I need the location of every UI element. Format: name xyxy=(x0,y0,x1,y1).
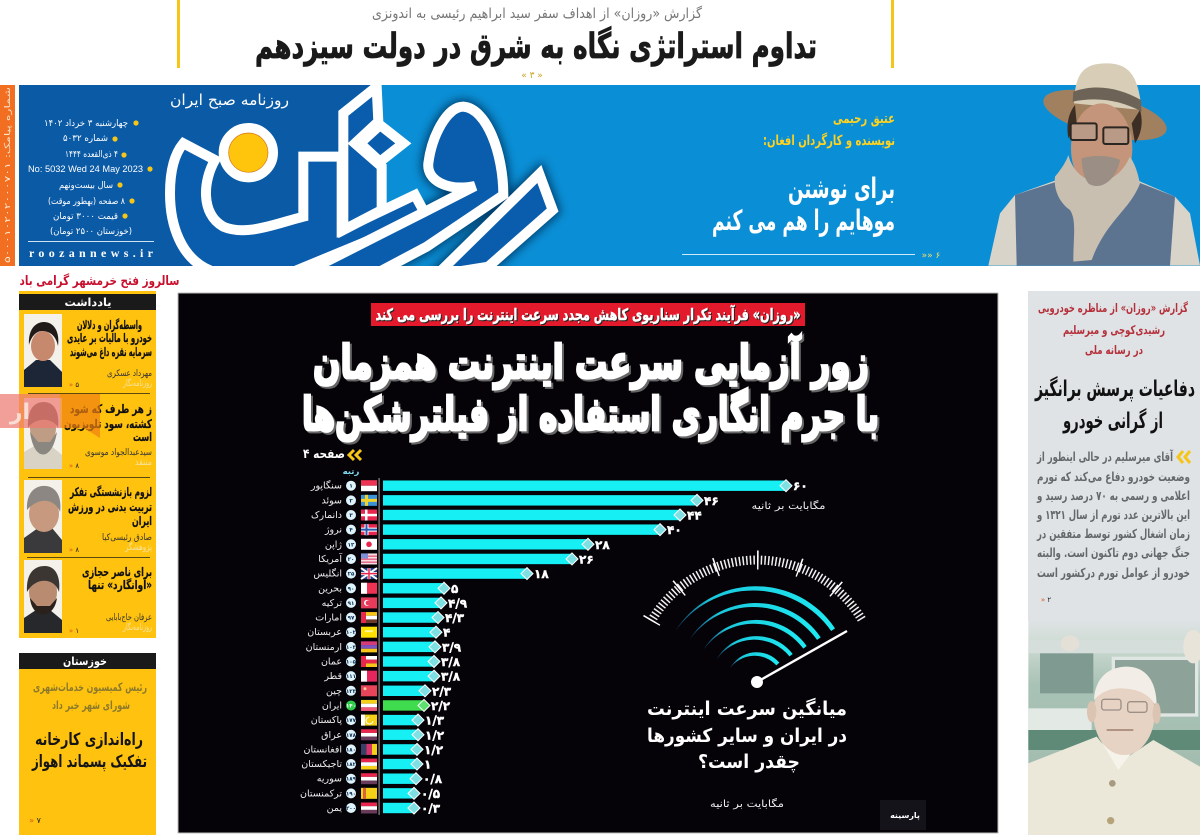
top story page reference: « ۳ » xyxy=(521,71,543,81)
story kicker xyxy=(1038,301,1188,357)
story headline xyxy=(1034,375,1195,434)
note four: برای ناصر حجازی xyxy=(82,565,152,579)
row: pakistan: پاکستان xyxy=(311,715,342,726)
row: syria: ۰/۸ xyxy=(423,772,443,786)
note one: خودرو با مالیات بر عایدی xyxy=(67,331,152,346)
interview kicker line two: نویسنده و کارگردان افغان: xyxy=(763,132,895,149)
sms number vertical: شماره پیامک: ۵۰۰۰۱۰۲۰۲۰۰۰۷۰۱ xyxy=(3,87,12,263)
row: syria: ۱۸۹ xyxy=(346,777,357,783)
note four: «آوانگارد» تنها xyxy=(88,577,152,593)
bar chart: internet speed by country xyxy=(300,479,808,816)
row: singapore xyxy=(310,479,808,493)
row: uae: امارات xyxy=(315,613,342,624)
website address: roozannews.ir xyxy=(29,246,154,260)
interview headline line one: برای نوشتن xyxy=(788,172,895,205)
note one: مهرداد عسکری xyxy=(107,369,152,379)
issue details xyxy=(28,119,153,237)
row: iraq: ۱/۲ xyxy=(425,728,445,742)
row: afghanistan xyxy=(303,743,444,757)
note three: ۸ « xyxy=(69,546,79,554)
note two xyxy=(24,398,152,470)
note two: ۸ « xyxy=(69,462,79,470)
note two: ز هر طرف که شود xyxy=(70,402,152,417)
newspaper tagline: روزنامه صبح ایران xyxy=(170,91,289,109)
row: turkmenistan: ۰/۵ xyxy=(421,787,440,801)
khuzestan page reference: ۷ « xyxy=(29,816,42,825)
source logo xyxy=(880,800,926,830)
row: iraq xyxy=(321,728,445,742)
story kicker: در رسانه ملی xyxy=(1085,343,1143,357)
row: iran xyxy=(322,699,451,713)
row: norway: ۴ xyxy=(349,528,353,534)
row: iran: ۱۴۰ xyxy=(346,703,356,709)
row: sweden: سوئد xyxy=(322,495,342,506)
row: pakistan: ۱۷۷ xyxy=(346,718,357,724)
note two: سیدعبدالجواد موسوی xyxy=(85,448,152,458)
row: denmark: دانمارک xyxy=(311,510,342,521)
row: denmark xyxy=(311,508,702,522)
row: bahrain xyxy=(318,582,458,596)
row: saudi arabia: عربستان xyxy=(307,627,342,638)
logo xyxy=(170,87,553,275)
note four: ۱ « xyxy=(69,627,79,635)
note three xyxy=(24,480,152,554)
row: usa xyxy=(318,552,594,566)
kicker on red band xyxy=(371,303,805,326)
note three: پژوهشگر xyxy=(124,541,152,553)
masthead banner xyxy=(0,63,1200,275)
row: tajikistan: تاجیکستان xyxy=(301,759,342,770)
row: yemen: ۲۰۰ xyxy=(346,806,356,812)
row: armenia: ۱۰۳ xyxy=(346,645,357,651)
row: singapore: ۶۰ xyxy=(793,479,808,493)
note one: واسطه‌گران و دلالان xyxy=(77,318,142,333)
row: yemen xyxy=(327,802,441,816)
note one: سرمایه نقره داغ می‌شوند xyxy=(70,345,152,360)
portrait: man with hat xyxy=(988,63,1200,266)
row: turkey: ترکیه xyxy=(322,598,342,609)
row: yemen: یمن xyxy=(327,803,342,814)
note three: صادق رئیسی‌کیا xyxy=(102,533,152,543)
row: japan xyxy=(325,538,610,552)
issue details: چهارشنبه ۳ خرداد ۱۴۰۲ xyxy=(44,119,128,129)
chart question line two: در ایران و سایر کشورها xyxy=(647,725,847,747)
row: usa: ۲۶ xyxy=(579,552,594,566)
row: saudi arabia: ۴ xyxy=(443,626,450,640)
row: afghanistan: ۱/۲ xyxy=(424,743,444,757)
top story headline: تداوم استراتژی نگاه به شرق در دولت سیزدهم xyxy=(255,26,817,67)
row: oman: عمان xyxy=(321,656,342,668)
row: uae xyxy=(315,611,465,625)
issue details: No: 5032 Wed 24 May 2023 xyxy=(28,164,143,174)
note two: است xyxy=(133,430,152,444)
row: bahrain: بحرین xyxy=(318,583,342,594)
issue details: قیمت ۳۰۰۰ تومان xyxy=(53,212,118,222)
interview headline line two: موهایم را هم می کنم xyxy=(712,204,895,237)
row: yemen: ۰/۳ xyxy=(421,802,441,816)
issue details: (خوزستان ۲۵۰۰ تومان) xyxy=(50,227,132,237)
row: oman: ۳/۸ xyxy=(441,655,461,669)
icon: wifi speed gauge xyxy=(651,560,863,688)
main title line one: زور آزمایی سرعت اینترنت همزمان xyxy=(313,334,869,389)
row: usa: آمریکا xyxy=(318,552,342,565)
chart question line three: چقدر است؟ xyxy=(698,751,800,773)
row: singapore: ۱ xyxy=(349,484,353,490)
row: turkmenistan: ۱۹۰ xyxy=(346,791,356,797)
chart question line one: میانگین سرعت اینترنت xyxy=(647,697,847,720)
row: tajikistan: ۱ xyxy=(424,758,431,772)
row: iran: ۲/۲ xyxy=(431,699,451,713)
khuzestan header: خوزستان xyxy=(63,654,107,669)
page reference: صفحه ۴ xyxy=(303,447,345,462)
row: armenia xyxy=(306,640,462,654)
watermark ribbon: ار xyxy=(9,400,30,425)
row: tajikistan xyxy=(301,758,431,772)
source logo: پارسینه xyxy=(890,811,920,820)
issue details: ۴ ذی‌القعده ۱۴۴۴ xyxy=(65,150,118,160)
row: uk xyxy=(313,567,549,581)
row: denmark: ۴۴ xyxy=(687,508,702,522)
story body xyxy=(1036,449,1190,581)
top story block xyxy=(177,0,894,81)
row: pakistan xyxy=(311,714,445,728)
row: pakistan: ۱/۳ xyxy=(425,714,445,728)
row: uk: ۱۸ xyxy=(534,567,549,581)
khuzestan headline two: تفکیک پسماند اهواز xyxy=(31,752,147,772)
kicker on red band: «روزان» فرآیند تکرار سناریوی کاهش مجدد سرعت اینترنت را بررسی می کند xyxy=(376,304,800,324)
note one: ۵ « xyxy=(69,381,79,389)
note three: ایران xyxy=(132,514,152,528)
khuzestan headline: راه‌اندازی کارخانه xyxy=(35,730,143,750)
row: china: ۱۲۳ xyxy=(346,689,357,695)
note four: عرفان حاج‌بابایی xyxy=(106,613,152,623)
row: uk: ۲۵ xyxy=(348,572,355,578)
top story kicker: گزارش «روزان» از اهداف سفر سید ابراهیم رئیسی به اندونزی xyxy=(372,5,702,22)
row: oman: ۱۰۵ xyxy=(346,660,357,666)
note three: لزوم بازنشستگی تفکر xyxy=(69,485,152,500)
note one: روزنامه‌نگار xyxy=(122,377,152,389)
row: iran: ایران xyxy=(322,700,342,711)
row: bahrain: ۵ xyxy=(451,582,458,596)
note four xyxy=(24,560,152,635)
story page reference: ۲ « xyxy=(1041,596,1051,604)
row: qatar xyxy=(323,670,461,684)
row: sweden: ۴۶ xyxy=(704,494,719,508)
row: uk: انگلیس xyxy=(313,568,342,580)
photo: man in parliament xyxy=(1028,620,1200,835)
row: oman xyxy=(321,655,461,669)
row: turkmenistan xyxy=(300,787,440,801)
note two: کشته، سود تلویزیون xyxy=(64,417,152,432)
issue details: ۸ صفحه (بهطور موقت) xyxy=(48,197,125,207)
row: syria xyxy=(317,772,443,786)
row: qatar: قطر xyxy=(323,671,342,682)
panel: right column story xyxy=(1028,291,1200,835)
notes header: یادداشت xyxy=(64,296,112,309)
row: syria: سوریه xyxy=(317,774,342,785)
row: turkey: ۹۱ xyxy=(348,601,354,607)
interview kicker: عتیق رحیمی xyxy=(833,111,895,127)
khuzestan kicker two: شورای شهر خبر داد xyxy=(52,698,130,713)
rank label: رتبه xyxy=(343,467,359,477)
row: china: ۲/۳ xyxy=(432,684,452,698)
row: afghanistan: افغانستان xyxy=(303,744,342,755)
row: japan: ۱۲ xyxy=(348,542,355,548)
row: norway: ۴۰ xyxy=(667,523,682,537)
row: iraq: عراق xyxy=(321,730,342,741)
row: turkey xyxy=(322,596,468,610)
row: norway xyxy=(324,523,682,537)
row: qatar: ۳/۸ xyxy=(441,670,461,684)
panel: notes column xyxy=(19,291,156,638)
row: saudi arabia: ۱۰۲ xyxy=(346,630,357,636)
row: qatar: ۱۱۱ xyxy=(346,674,356,680)
row: uae: ۹۷ xyxy=(348,616,355,622)
row: iraq: ۱۷۸ xyxy=(346,733,357,739)
row: uae: ۴/۳ xyxy=(445,611,465,625)
row: china: چین xyxy=(326,686,342,697)
note four: روزنامه‌نگار xyxy=(122,621,152,633)
row: armenia: ۳/۹ xyxy=(442,640,462,654)
row: china xyxy=(326,684,452,698)
row: japan: ژاپن xyxy=(325,539,342,550)
note one xyxy=(24,314,152,389)
row: norway: نروژ xyxy=(324,525,342,536)
row: afghanistan: ۱۸۰ xyxy=(346,747,356,753)
row: usa: ۲۰ xyxy=(348,557,354,563)
note three: تربیت بدنی در ورزش xyxy=(68,500,152,515)
unit label top: مگابایت بر ثانیه xyxy=(752,500,826,512)
row: singapore: سنگاپور xyxy=(310,480,342,492)
row: denmark: ۳ xyxy=(349,513,353,519)
row: turkey: ۴/۹ xyxy=(448,596,468,610)
issue details: شماره ۵۰۳۲ xyxy=(63,134,108,144)
watermark ribbon xyxy=(0,394,100,438)
panel: khuzestan xyxy=(19,653,156,835)
interview page reference: ۶ «« xyxy=(922,251,941,261)
row: sweden xyxy=(322,494,719,508)
row: turkmenistan: ترکمنستان xyxy=(300,788,342,799)
row: sweden: ۲ xyxy=(349,498,353,504)
unit label bottom: مگابایت بر ثانیه xyxy=(710,798,784,810)
row: bahrain: ۹۰ xyxy=(348,586,354,592)
khuzestan kicker: رئیس کمیسیون خدمات‌شهری xyxy=(33,680,147,695)
row: armenia: ارمنستان xyxy=(306,642,342,653)
issue details: سال بیست‌ونهم xyxy=(59,181,113,191)
row: japan: ۲۸ xyxy=(595,538,610,552)
occasion line: سالروز فتح خرمشهر گرامی باد xyxy=(20,273,180,289)
note two: منتقد xyxy=(135,458,152,468)
main title line two: با جرم انگاری استفاده از فیلترشکن‌ها xyxy=(302,387,879,441)
row: saudi arabia xyxy=(307,626,450,640)
row: tajikistan: ۱۸۲ xyxy=(346,762,357,768)
panel: main infographic xyxy=(178,293,998,833)
